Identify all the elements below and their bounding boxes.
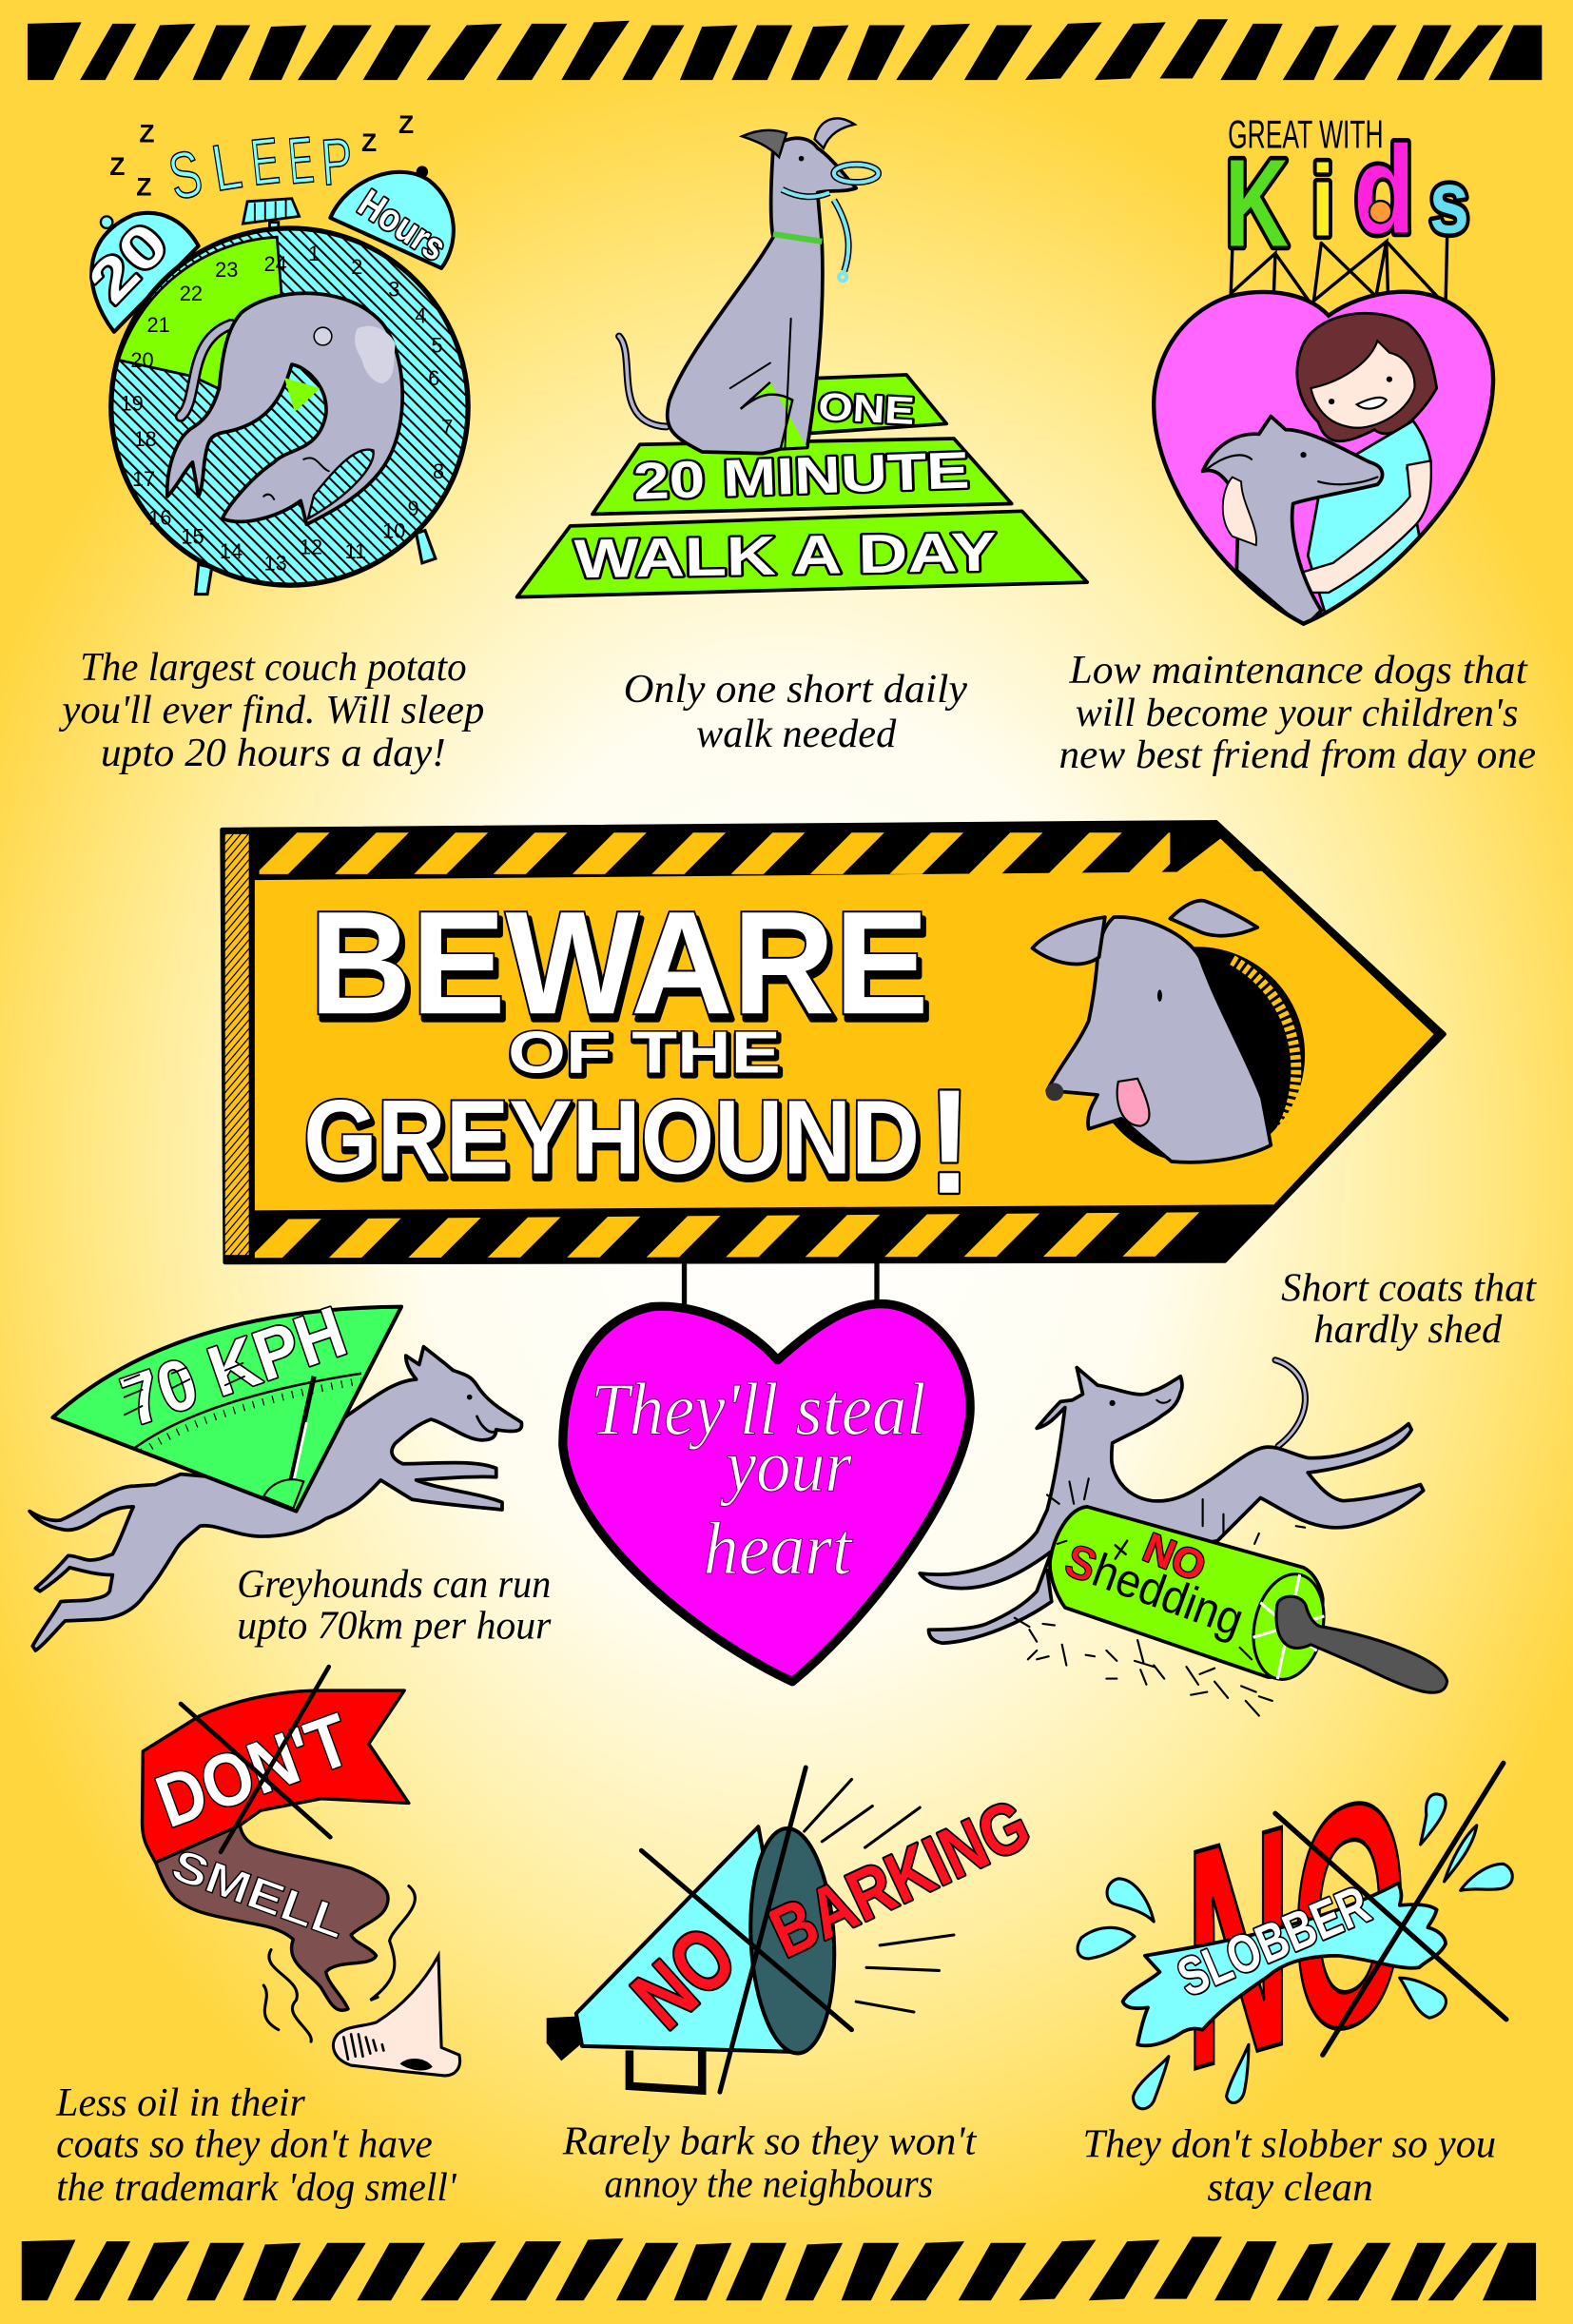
caption: couch potato: you'll ever find. Will sleep [58,689,484,732]
girl arm [1300,460,1431,593]
leash colour [782,165,879,281]
caption: no barking: Rarely bark so they won't [562,2120,978,2164]
podium text: ONE [817,384,916,433]
kids letters: i [1311,146,1334,258]
sign outer board [223,822,1445,1262]
girl dress [1308,420,1430,615]
dog eye, nose and tongue [1046,989,1162,1126]
caption: 70 km: upto 70km per hour [237,1605,552,1649]
bell with hours: Hours [351,181,455,269]
cross out [1275,1763,1506,2055]
clock hour numbers: 10 [382,518,405,542]
slobber text: SLOBBER [1169,1874,1378,2007]
smell squiggles [263,1886,415,2041]
heading: beware: BEWARE [310,880,929,1045]
panel: no slobber [1078,1724,1512,2138]
clock hour numbers: 6 [428,366,439,390]
caption: short coats [1281,1266,1537,1352]
tail [181,324,231,417]
nose [333,1956,460,2076]
megaphone mouthpiece [547,2017,582,2060]
clock top button [243,199,300,237]
heart outline [1154,292,1493,624]
caption: 70 km: Greyhounds can run [237,1563,551,1607]
caption: great with children: new best friend from day one [1059,733,1536,777]
clock hour numbers: 24 [264,252,287,276]
caption: great with children: Low maintenance dogs that [1068,649,1528,693]
roller handle [1276,1596,1447,1692]
dog tail [619,337,667,427]
greyhound head through hole [1047,917,1271,1162]
clock hour numbers: 16 [148,505,171,529]
kids letters [1225,121,1469,273]
hole ring [1233,960,1296,1141]
hugging dog [1203,417,1383,628]
heart message: They'll steal [591,1369,925,1451]
hanging heart [563,1304,970,1682]
clock hour numbers: 20 [130,348,154,372]
clock hour numbers: 23 [215,258,238,282]
clock hour numbers: 2 [351,255,362,279]
speed lines [125,1363,244,1415]
heart message [591,1369,925,1590]
speed gauge [52,1307,401,1512]
caption: short coats: hardly shed [1313,1308,1503,1352]
d letter orange centre [1369,201,1391,223]
no text: NO [615,1908,754,2047]
dog face [1204,452,1377,484]
z letters: Z [136,173,151,202]
gauge arc and ticks [133,1374,361,1452]
caption: short walk: walk needed [696,713,897,756]
girl far hand [1223,477,1256,545]
sitting greyhound [668,138,856,454]
clock hour numbers [120,242,453,576]
sign hanging chains [685,1260,877,1310]
caption: dog smell: Less oil in their [55,2081,305,2125]
shed fur marks [1015,1494,1305,1716]
caption: dog smell: the trademark 'dog smell' [56,2166,457,2210]
clock hour numbers: 15 [181,525,204,549]
top hazard stripe [28,19,1542,80]
clock hour numbers: 21 [147,313,170,337]
caption: dog smell [55,2081,457,2210]
caption: no slobber [1082,2123,1496,2210]
clock hour numbers: 12 [300,535,322,558]
dog ears [1033,901,1257,964]
clock hour numbers: 18 [134,427,157,451]
cross out [181,1667,330,1852]
left edge strip [225,834,249,1255]
barking text: BARKING [758,1784,1041,1972]
panel: steal your heart [563,1304,970,1682]
panel: no shedding [920,1360,1447,1716]
bell with 20 [76,210,199,332]
kids letters: d [1353,121,1414,260]
heading: greyhound: GREYHOUND [303,1079,920,1196]
top band corner [1176,839,1254,872]
panel: no barking [547,1767,1041,2092]
bottom hazard band [255,1212,1236,1258]
red banner [143,1690,409,1863]
heading: of the: OF THE [510,1024,782,1089]
caption: great with children: will become your children's [1076,692,1518,735]
girl face [1311,341,1414,428]
clock face [111,228,468,585]
megaphone stand [630,2050,702,2091]
caption: no slobber: They don't slobber so you [1082,2123,1496,2167]
hole in sign [1089,947,1305,1163]
clock hour numbers: 5 [431,334,443,358]
clock hour numbers: 9 [407,497,419,520]
dog tail [1275,1360,1305,1446]
clock hour numbers: 4 [415,304,426,328]
sleep heading [163,123,355,214]
megaphone cone [576,1826,800,2052]
cross out [641,1767,852,2092]
sleep heading: E [247,124,282,200]
dog ears, leg and eye [730,118,855,449]
dog eye and fur [1069,1400,1223,1533]
girl hair [1297,313,1437,441]
clock hour numbers: 17 [132,467,155,491]
greyhound jumping [920,1368,1424,1643]
top hazard band [260,832,1170,874]
leash [782,165,879,271]
z letters: Z [109,152,125,181]
sleep heading: P [319,125,355,200]
caption: no slobber: stay clean [1207,2166,1373,2210]
curled sleeping greyhound [167,293,402,524]
podium text: WALK A DAY [573,522,997,590]
panel: one 20 minute walk a day [517,118,1087,597]
bell with hours [330,166,455,269]
clock hour numbers: 11 [344,539,366,563]
heading: of the: OF THE [508,1021,781,1086]
sleep heading: S [163,136,208,214]
caption: short walk: Only one short daily [624,668,967,712]
main board face [255,871,1434,1210]
dog eye and mouth [467,1395,497,1432]
caption: 70 km [237,1563,552,1649]
caption: short coats: Short coats that [1281,1266,1537,1310]
bottom hazard stripe [22,2236,1536,2300]
clock hour numbers: 22 [180,282,203,305]
smell text: SMELL [165,1840,352,1948]
panel: sleep 20 hours alarm clock [76,110,468,595]
heading: beware: BEWARE [313,887,932,1051]
kids letters: s [1429,152,1469,252]
70 kph heading: 70 KPH [112,1291,356,1441]
caption: great with children [1059,649,1536,777]
clock hour numbers: 14 [220,539,243,563]
clock hour numbers: 3 [388,277,399,301]
brown smell ribbon [156,1826,388,2010]
heart fill [1154,292,1493,624]
running greyhound [29,1347,522,1650]
caption: short walk [624,668,967,756]
clock hour numbers: 7 [441,415,453,439]
caption: dog smell: coats so they don't have [56,2123,433,2167]
z letters: Z [139,120,155,148]
caption: no barking [562,2120,978,2207]
no text: NO [1136,1525,1212,1591]
clock hour numbers: 13 [264,552,287,576]
heart message: heart [704,1508,854,1590]
podium text [573,384,997,590]
roller end [1244,1568,1333,1686]
lint roller body [1050,1507,1323,1677]
scaffold [1231,239,1447,303]
exclamation mark: ! [927,1060,972,1225]
panel: great with kids [1154,112,1493,628]
clock hour numbers: 19 [120,391,144,415]
panel: beware of the greyhound sign [223,822,1445,1310]
sleep heading: E [285,123,317,198]
sleep heading: L [207,128,246,205]
clock hour numbers: 1 [308,242,320,265]
don't text: DON'T [146,1698,360,1844]
clock feet [196,531,436,595]
panel: don't smell [143,1667,460,2076]
kids letters: K [1225,134,1289,273]
caption: no barking: annoy the neighbours [604,2163,933,2207]
collar [773,234,822,242]
panel: 70 kph [29,1291,522,1650]
shedding text: Shedding [1058,1533,1251,1647]
great with heading: GREAT WITH [1228,112,1384,157]
caption: couch potato [58,646,484,775]
z letters: Z [398,110,414,139]
heart message: your [720,1425,852,1507]
hatched gap and coat patches [263,326,396,518]
caption: couch potato: upto 20 hours a day! [101,732,446,775]
z letters: Z [361,128,377,157]
girl hugging dog [1203,313,1437,628]
bell with 20: 20 [76,210,182,316]
podium text: 20 MINUTE [632,441,970,511]
green awake sector [119,237,282,388]
podium steps [517,375,1087,597]
z letters [109,110,414,202]
heading: greyhound: GREYHOUND [305,1084,922,1201]
megaphone mouth [745,1826,840,2056]
caption: couch potato: The largest couch potato [80,646,467,690]
clock hour numbers: 8 [433,459,444,483]
plus mark [1116,1541,1127,1558]
spit drops [1078,1794,1512,2109]
gauge needle [263,1377,314,1508]
slobber splash banner [1123,1884,1446,2045]
sound lines [805,1779,954,2012]
